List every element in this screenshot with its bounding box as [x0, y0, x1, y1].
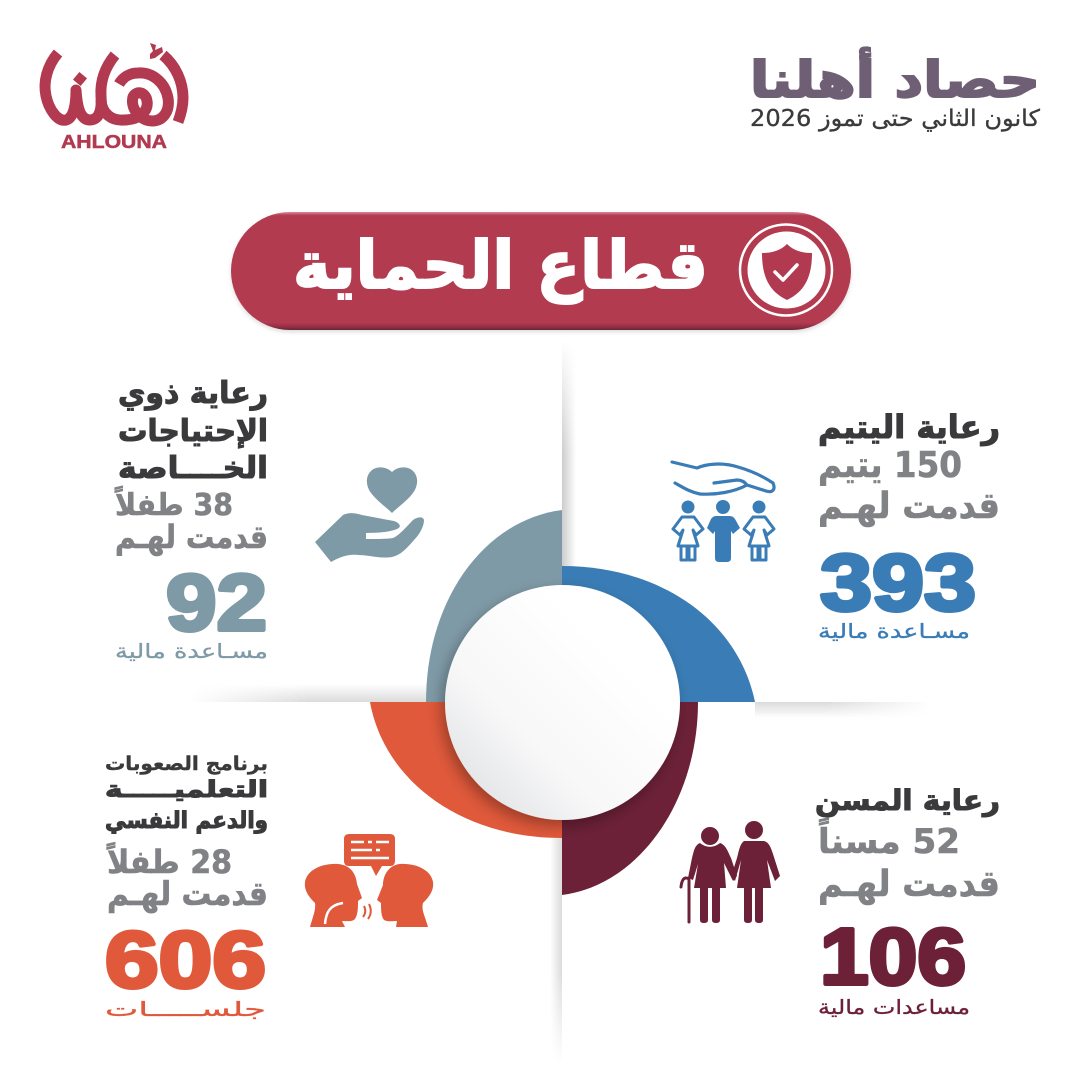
panel: elderly care [681, 784, 1000, 1019]
value: 393 [820, 538, 976, 627]
logo dot [73, 72, 87, 86]
provided label: قدمت لهـم [818, 864, 1000, 905]
icon: speaking heads [305, 834, 433, 927]
chart: quadrant ring [370, 510, 755, 895]
header subtitle: كانون الثاني حتى تموز 2026 [750, 106, 1040, 132]
banner title: قطاع الحماية [293, 227, 708, 304]
heading line 2: الإحتياجات [118, 414, 268, 449]
heading line 2: التعلميـــــة [105, 777, 268, 803]
icon: hand holding heart [315, 467, 424, 562]
unit: جلســـــات [105, 997, 266, 1021]
arc: maroon, elderly [562, 702, 698, 895]
elder count: 52 مسناً [818, 817, 960, 862]
unit: مسـاعدة مالية [818, 619, 970, 643]
orphan count: 150 يتيم [818, 445, 962, 486]
unit: مسـاعدة مالية [115, 639, 268, 663]
logo wordmark: AHLOUNA [61, 132, 167, 152]
logo: Ahlouna [45, 43, 183, 152]
centre disc [445, 585, 680, 820]
heading line 1: رعاية ذوي [118, 376, 268, 411]
provided label: قدمت لهـم [107, 874, 268, 914]
heading line 3: والدعم النفسي [105, 808, 268, 834]
panel: orphan care [672, 408, 1000, 643]
heading: رعاية المسن [815, 784, 1000, 817]
panel: special needs care [114, 376, 424, 663]
logo mark [45, 53, 183, 122]
value: 92 [166, 558, 267, 647]
child count: 28 طفلاً [106, 841, 232, 881]
child count: 38 طفلاً [114, 486, 233, 523]
heading line 1: برنامج الصعوبات [105, 753, 268, 775]
panel shadows [218, 360, 904, 1042]
logo hamza [150, 43, 163, 59]
icon: elderly couple [681, 821, 780, 923]
value: 606 [105, 915, 266, 1004]
unit: مساعدات مالية [818, 995, 970, 1019]
arc: blue, orphans [562, 566, 755, 702]
panel: learning difficulties [105, 753, 433, 1021]
icon: hand over children [672, 462, 774, 562]
section banner [231, 212, 851, 330]
banner pill [231, 212, 851, 330]
provided label: قدمت لهـم [818, 486, 1000, 527]
provided label: قدمت لهـم [115, 518, 268, 556]
heading: رعاية اليتيم [818, 408, 1000, 446]
value: 106 [820, 912, 966, 1001]
arc: orange, learning difficulties [370, 702, 562, 838]
header title: حصاد أهلنا [750, 47, 1040, 109]
heading line 3: الخــــاصة [118, 451, 268, 486]
icon: shield [740, 224, 832, 316]
arc: gray, special needs [426, 510, 562, 702]
